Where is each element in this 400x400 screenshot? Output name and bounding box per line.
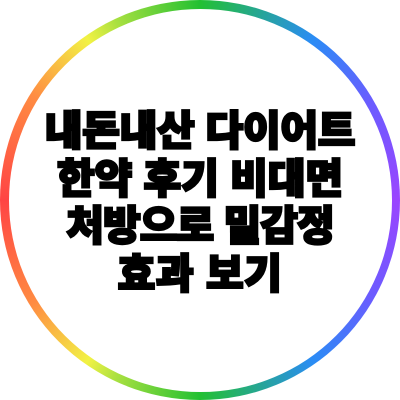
title line 1: 내돈내산 다이어트	[45, 108, 355, 154]
title line 3: 처방으로 밀감정	[66, 203, 334, 249]
title line 4: 효과 보기	[118, 251, 282, 297]
title line 2: 한약 후기 비대면	[57, 156, 343, 202]
